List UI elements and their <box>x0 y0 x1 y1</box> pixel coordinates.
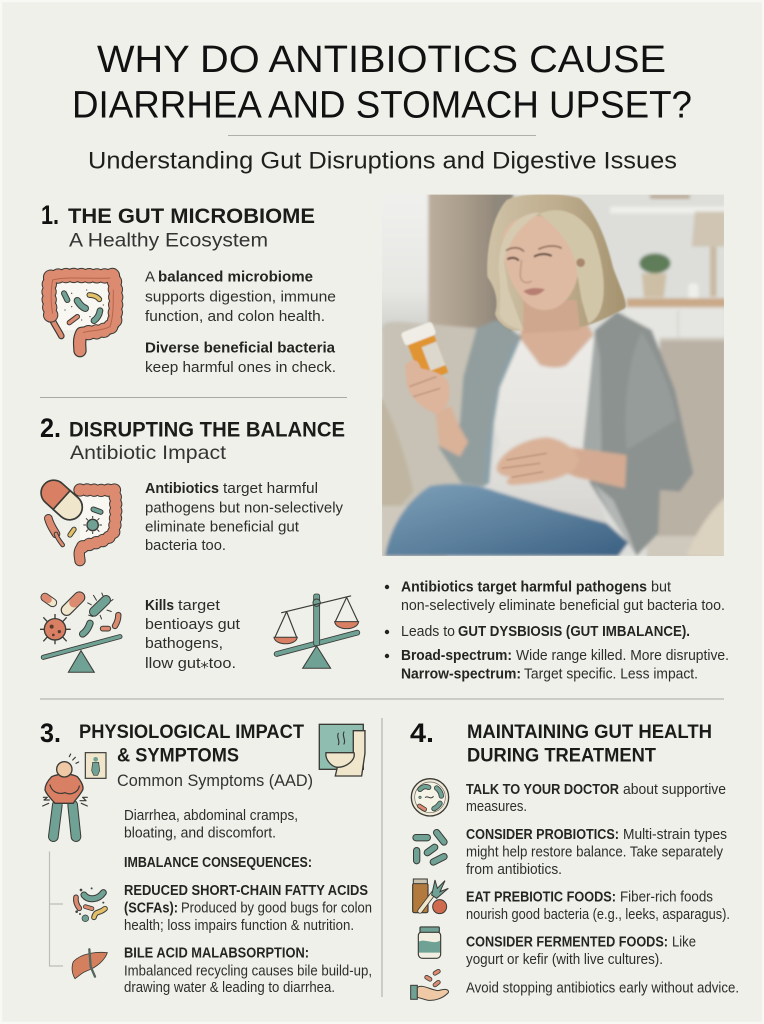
probiotics tip: might help restore balance. Take separately <box>466 844 724 860</box>
fermented foods tip <box>466 934 696 968</box>
panel: section 3 physiological impact <box>40 718 372 996</box>
title <box>72 39 692 126</box>
icon: person with stomach cramps <box>43 753 106 837</box>
section 1 text: function, and colon health. <box>145 308 325 325</box>
symptoms text: Diarrhea, abdominal cramps, <box>124 808 298 824</box>
SCFA text <box>124 883 372 934</box>
section 1 subheading: A Healthy Ecosystem <box>69 230 268 252</box>
symptoms text: bloating, and discomfort. <box>124 826 276 842</box>
bullet list: antibiotic effects: Narrow-spectrum: <box>401 666 521 682</box>
probiotics tip <box>466 827 727 878</box>
section 1 number: 1. <box>41 200 59 230</box>
bile acid text: BILE ACID MALABSORPTION: <box>124 946 309 962</box>
fermented foods tip: Like <box>672 934 696 950</box>
symptoms text <box>124 808 298 842</box>
section 2 number: 2. <box>40 413 61 443</box>
section 1 text <box>145 268 336 376</box>
photo: woman on sofa reading pill bottle, hand on stomach <box>380 190 727 559</box>
icon: probiotic capsules <box>416 833 444 862</box>
panel: header <box>72 39 692 174</box>
section 2 text: kills: target <box>178 597 221 614</box>
bullet list: antibiotic effects: Antibiotics target harmful pathogens <box>401 578 647 596</box>
section 2 heading: DISRUPTING THE BALANCE <box>69 418 345 442</box>
section 1 text: balanced microbiome <box>158 268 313 286</box>
section 1 text: A <box>145 268 155 286</box>
title: WHY DO ANTIBIOTICS CAUSE <box>97 39 666 81</box>
SCFA text: REDUCED SHORT-CHAIN FATTY ACIDS <box>124 883 368 899</box>
section 4 number: 4. <box>410 718 434 748</box>
doctor tip: TALK TO YOUR DOCTOR <box>466 782 619 798</box>
title: DIARRHEA AND STOMACH UPSET? <box>72 84 692 126</box>
fermented foods tip: CONSIDER FERMENTED FOODS: <box>466 934 668 950</box>
icon: liver <box>72 949 107 979</box>
SCFA text: health; loss impairs function & nutrition. <box>124 918 354 934</box>
section 4 heading: DURING TREATMENT <box>467 746 656 766</box>
bullet list: antibiotic effects: Broad-spectrum: <box>401 647 512 664</box>
section 2 text: kills: bentioays gut <box>145 616 241 633</box>
section 2 text: antibiotics: eliminate beneficial gut <box>145 518 300 536</box>
section 3 heading: PHYSIOLOGICAL IMPACT <box>79 722 304 743</box>
icon: yogurt jar <box>418 927 441 958</box>
panel: section 4 maintaining gut health <box>410 718 739 1000</box>
icon: microbes on tilted seesaw <box>40 593 120 672</box>
bile acid text: drawing water & leading to diarrhea. <box>124 980 335 996</box>
icon: healthy colon with bacteria <box>49 275 116 351</box>
icon: prebiotic foods jar, leek and tomato <box>413 879 448 914</box>
section 2 text: kills: llow gut⁎too. <box>145 655 236 672</box>
prebiotic tip <box>466 890 730 923</box>
section 2 subheading: Antibiotic Impact <box>70 442 227 464</box>
bullet list: antibiotic effects: Target specific. Less impact. <box>524 666 698 682</box>
icon: toilet with steam <box>319 724 365 776</box>
SCFA text: Produced by good bugs for colon <box>181 900 372 916</box>
section 2 text: antibiotics <box>145 480 343 554</box>
bullet list: antibiotic effects: Leads to <box>401 623 455 640</box>
bullet list: antibiotic effects: but <box>651 578 672 596</box>
icon: antibiotic capsule over colon <box>36 475 116 561</box>
probiotics tip: from antibiotics. <box>466 862 562 878</box>
bile acid text <box>124 946 372 996</box>
probiotics tip: Multi-strain types <box>623 827 727 843</box>
prebiotic tip: EAT PREBIOTIC FOODS: <box>466 890 616 906</box>
prebiotic tip: Fiber-rich foods <box>620 890 713 906</box>
section 3 heading <box>79 722 304 766</box>
section 1 text: keep harmful ones in check. <box>145 359 336 376</box>
subtitle: Understanding Gut Disruptions and Digestive Issues <box>88 148 677 174</box>
bile acid text: Imbalanced recycling causes bile build-up, <box>124 964 372 980</box>
icon: balance scale <box>274 594 359 668</box>
section 1 heading: THE GUT MICROBIOME <box>68 204 315 228</box>
panel: section 1 gut microbiome <box>41 200 336 376</box>
bullet list: antibiotic effects: non-selectively eliminate beneficial gut bacteria too. <box>401 597 725 614</box>
avoid stopping tip: Avoid stopping antibiotics early without advice. <box>466 980 739 996</box>
imbalance consequences heading: IMBALANCE CONSEQUENCES: <box>124 855 312 871</box>
section 1 text: Diverse beneficial bacteria <box>145 340 336 356</box>
bullet list: antibiotic effects: GUT DYSBIOSIS (GUT IMBALANCE). <box>458 623 690 640</box>
section 3 number: 3. <box>40 718 61 748</box>
doctor tip: about supportive <box>623 782 726 798</box>
bullet list: antibiotic effects: Wide range killed. More disruptive. <box>516 647 729 664</box>
section 4 heading <box>467 722 712 766</box>
bullet list: antibiotic effects <box>385 578 729 682</box>
section 2 text: kills <box>145 597 241 672</box>
section 2 text: kills: bathogens, <box>145 635 223 652</box>
section 2 text: antibiotics: pathogens but non-selectively <box>145 500 343 516</box>
icon: short-chain fatty acid molecules <box>75 887 105 922</box>
doctor tip: measures. <box>466 799 527 815</box>
panel: section 2 disrupting the balance <box>36 413 359 672</box>
prebiotic tip: nourish good bacteria (e.g., leeks, asparagus). <box>466 907 730 923</box>
section 3 subheading: Common Symptoms (AAD) <box>117 771 313 790</box>
section 4 heading: MAINTAINING GUT HEALTH <box>467 722 712 743</box>
section 2 text: kills: Kills <box>145 597 174 614</box>
fermented foods tip: yogurt or kefir (with live cultures). <box>466 952 663 968</box>
section 1 text: supports digestion, immune <box>145 288 336 306</box>
section 2 text: antibiotics: bacteria too. <box>145 537 226 554</box>
icon: petri dish <box>411 779 449 816</box>
section 3 heading: & SYMPTOMS <box>117 746 239 766</box>
icon: hand with pills <box>411 971 448 1000</box>
SCFA text: (SCFAs): <box>124 900 178 916</box>
section 2 text: antibiotics: target harmful <box>223 480 318 497</box>
probiotics tip: CONSIDER PROBIOTICS: <box>466 827 619 843</box>
section 2 text: antibiotics: Antibiotics <box>145 480 219 497</box>
doctor tip <box>466 782 726 815</box>
